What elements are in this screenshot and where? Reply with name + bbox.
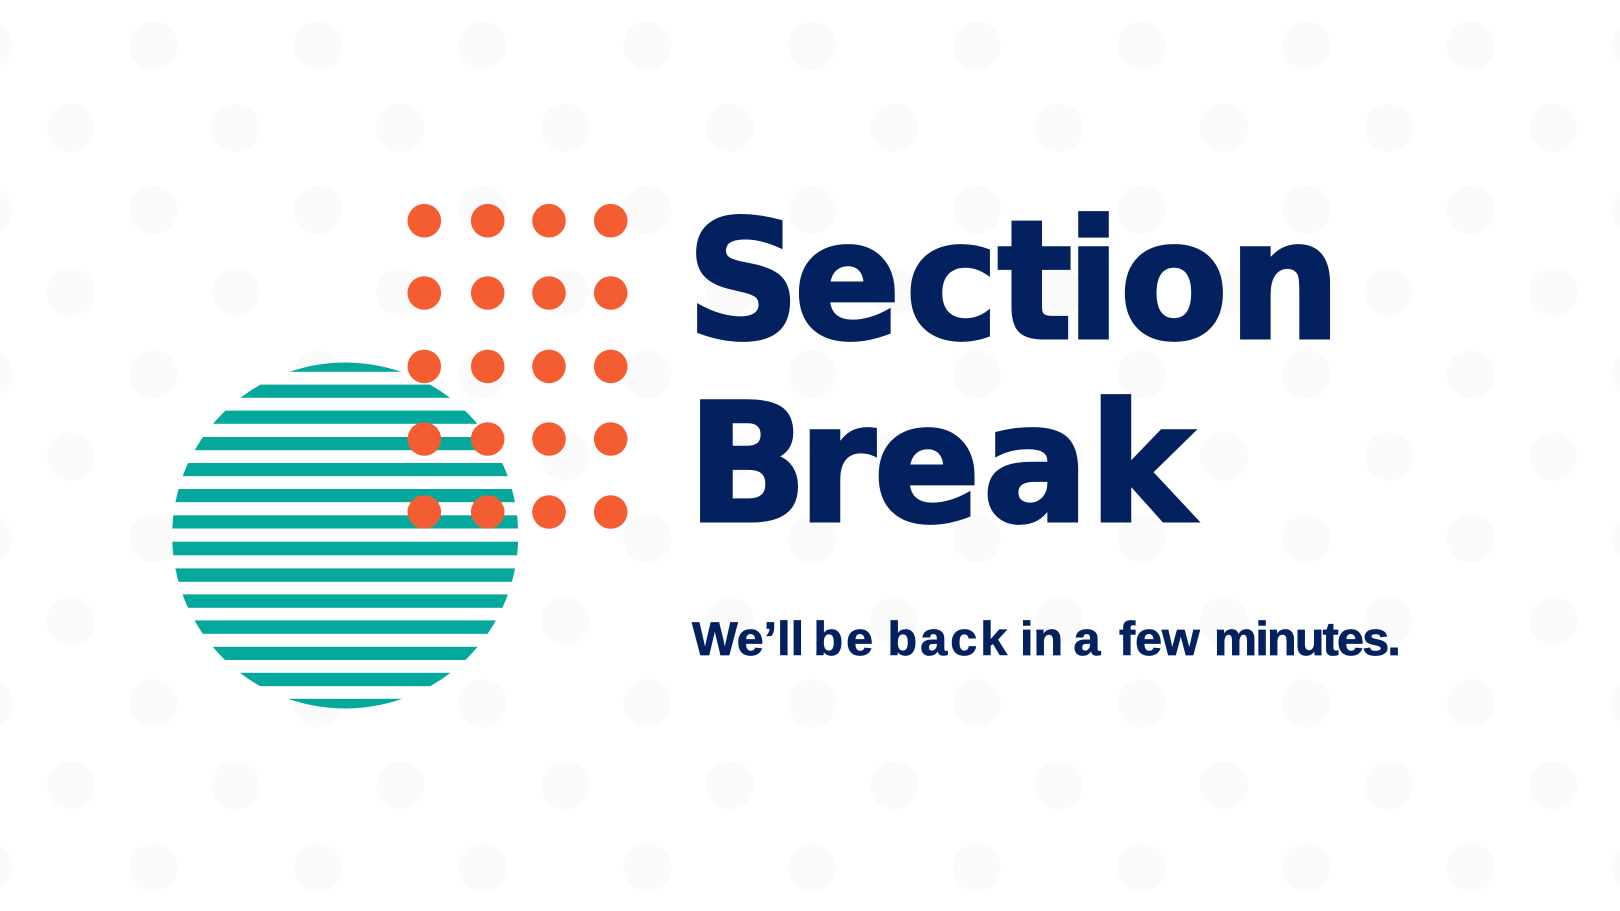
striped teal circle [170,360,520,710]
subtitle: minutes. [1214,614,1399,666]
subtitle: few [1119,614,1213,666]
title [686,186,1341,561]
subtitle: be [813,614,893,666]
subtitle: a [1073,614,1114,666]
title: Break [687,369,1198,561]
subtitle: We’ll [692,614,817,666]
subtitle: in [1020,614,1076,666]
title: Section [686,186,1341,378]
subtitle: back [888,614,1027,666]
orange dot grid [408,204,628,529]
